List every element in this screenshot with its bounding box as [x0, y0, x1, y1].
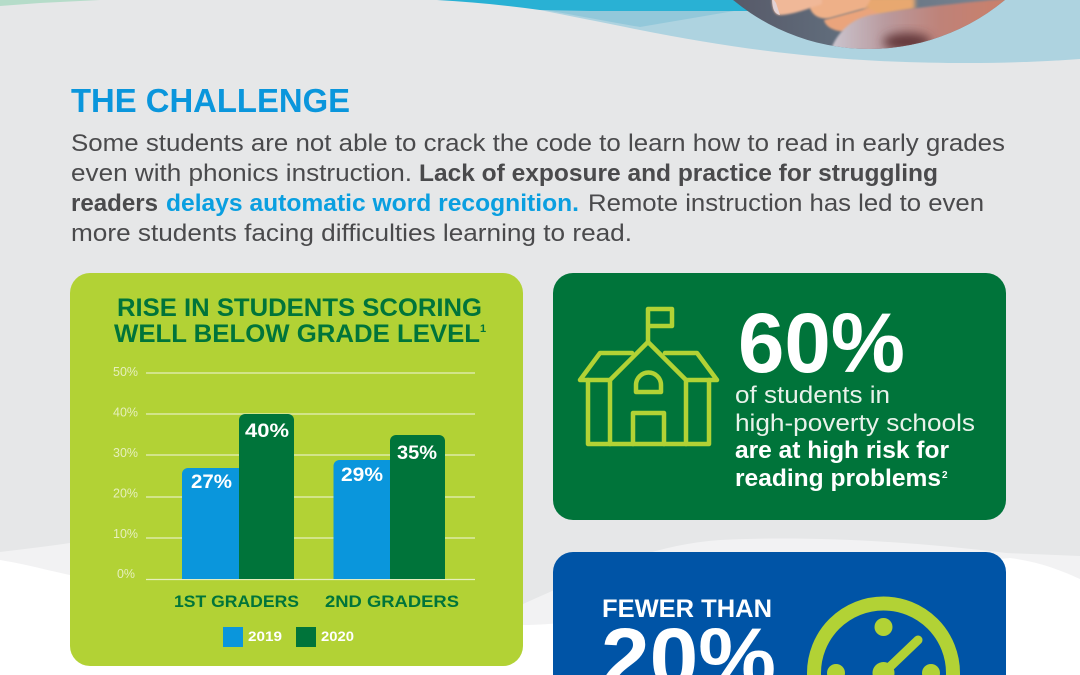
- icon: clock: [814, 604, 953, 675]
- y axis labels: 50%: [113, 365, 138, 379]
- background: lower white wave: [0, 558, 1080, 675]
- bar: 2nd graders 2019, 29%: [334, 460, 390, 579]
- text block: challenge description: readers: [71, 190, 158, 217]
- statistic description: reading problems: [735, 465, 941, 492]
- legend: [223, 627, 354, 647]
- background: top teal band: [437, 0, 760, 11]
- background: top light blue wave: [540, 0, 1080, 63]
- chart title: WELL BELOW GRADE LEVEL: [114, 320, 480, 348]
- text block: challenge description: even with phonics instruction.: [71, 160, 412, 187]
- bar: 1st graders 2020, 40%: [239, 414, 294, 579]
- statistic description: high-poverty schools: [735, 410, 975, 437]
- bar: 1st graders 2020, 40%: 40%: [245, 421, 289, 442]
- legend: 2020: [321, 629, 354, 644]
- bar: 1st graders 2019, 27%: 27%: [191, 472, 232, 493]
- category labels: [174, 592, 459, 611]
- heading: the challenge: THE CHALLENGE: [71, 82, 350, 119]
- panel: 60% statistic: [553, 273, 1006, 520]
- panel: bar chart card: [70, 273, 523, 666]
- statistic description: [735, 382, 975, 492]
- photo: child's hand on a circular crop: [733, 0, 1005, 49]
- chart title: RISE IN STUDENTS SCORING: [117, 294, 482, 322]
- background: top-left green wave: [0, 0, 100, 6]
- bar: 2nd graders 2020, 35%: [390, 435, 445, 579]
- text block: challenge description: Lack of exposure and practice for struggling: [419, 160, 938, 187]
- bar: 2nd graders 2019, 29%: 29%: [341, 465, 383, 486]
- text block: challenge description: delays automatic word recognition.: [166, 190, 579, 217]
- statistic description: of students in: [735, 382, 890, 409]
- label: fewer than: FEWER THAN: [602, 595, 772, 623]
- statistic description: 2: [942, 470, 948, 481]
- text block: challenge description: Remote instruction has led to even: [588, 190, 984, 217]
- category labels: 2ND GRADERS: [325, 592, 459, 611]
- text block: challenge description: Some students are not able to crack the code to learn how to read in early grades: [71, 130, 1005, 157]
- y axis labels: 10%: [113, 527, 138, 541]
- category labels: 1ST GRADERS: [174, 592, 299, 611]
- panel: fewer than 20% statistic: [553, 552, 1006, 675]
- bar: 1st graders 2019, 27%: [182, 468, 239, 579]
- y axis labels: 0%: [117, 567, 135, 581]
- statistic description: are at high risk for: [735, 437, 949, 464]
- legend: 2019: [248, 629, 282, 644]
- y axis labels: 30%: [113, 446, 138, 460]
- background: lower light wave: [0, 539, 1080, 675]
- icon: school building: [580, 309, 717, 444]
- chart title: [114, 294, 486, 348]
- y axis labels: [113, 365, 138, 581]
- y axis labels: 20%: [113, 486, 138, 500]
- big number: 60%: 60%: [738, 296, 905, 390]
- text block: challenge description: [71, 130, 1005, 247]
- text block: challenge description: more students facing difficulties learning to read.: [71, 220, 632, 247]
- y axis labels: 40%: [113, 406, 138, 420]
- chart title: 1: [480, 323, 486, 335]
- bar: 2nd graders 2020, 35%: 35%: [397, 443, 437, 464]
- background: mid blue wedge: [545, 10, 740, 27]
